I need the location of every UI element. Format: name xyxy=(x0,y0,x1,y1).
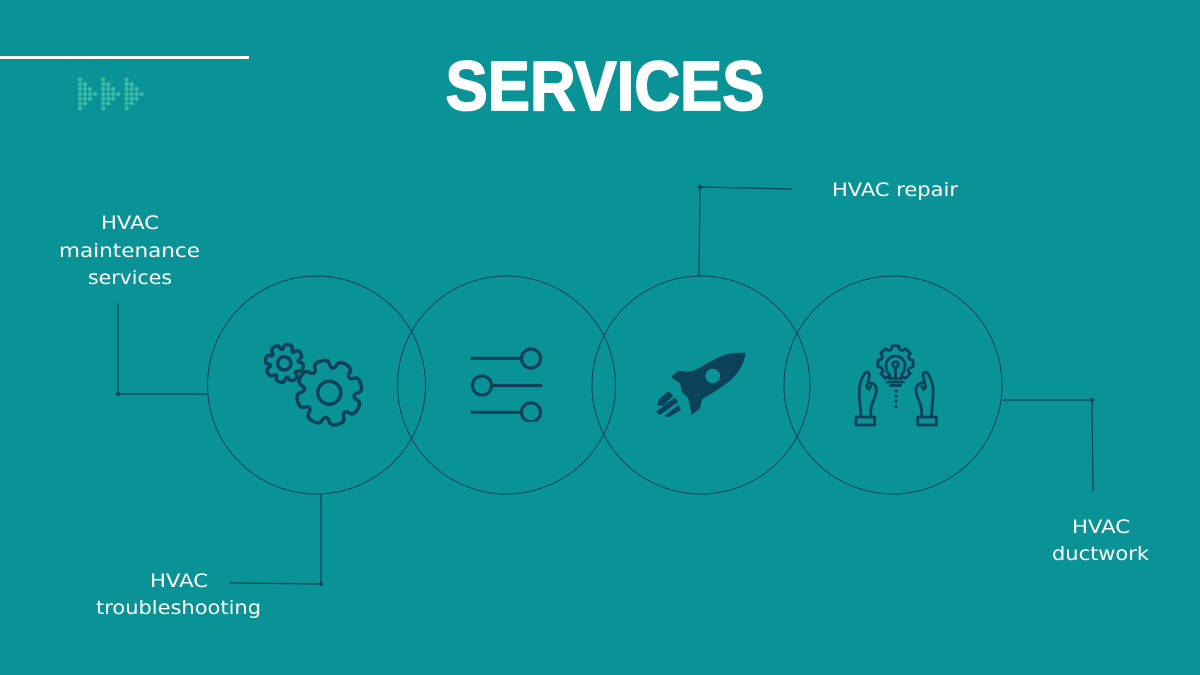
label: HVAC maintenance services: maintenance xyxy=(59,240,200,262)
icon: hands with lightbulb gear xyxy=(856,346,936,425)
connector: repair xyxy=(699,186,792,276)
right hand xyxy=(916,372,936,425)
label: HVAC maintenance services: HVAC xyxy=(101,212,159,234)
connector: ductwork xyxy=(1003,399,1093,491)
icon: sliders xyxy=(472,349,541,422)
label: HVAC ductwork: ductwork xyxy=(1052,543,1149,565)
connector: troubleshooting xyxy=(229,494,322,585)
label: HVAC troubleshooting: HVAC xyxy=(150,570,208,592)
label: HVAC troubleshooting xyxy=(96,570,261,619)
top accent line xyxy=(0,56,249,59)
label: HVAC ductwork: HVAC xyxy=(1072,516,1130,538)
connector: maintenance xyxy=(117,303,208,395)
label: HVAC ductwork xyxy=(1052,516,1149,565)
label: HVAC repair: HVAC repair xyxy=(832,179,958,201)
label: HVAC maintenance services: services xyxy=(88,267,172,289)
icon: dotted arrows xyxy=(78,77,144,111)
label: HVAC troubleshooting: troubleshooting xyxy=(96,597,261,619)
title: SERVICES xyxy=(446,47,764,125)
icon: rocket xyxy=(656,353,746,417)
four overlapping circles xyxy=(208,276,1002,494)
icon: gears xyxy=(261,340,369,433)
label: HVAC maintenance services xyxy=(59,212,200,289)
dots xyxy=(895,391,897,407)
left hand xyxy=(856,372,876,425)
lightbulb gear xyxy=(878,346,913,386)
